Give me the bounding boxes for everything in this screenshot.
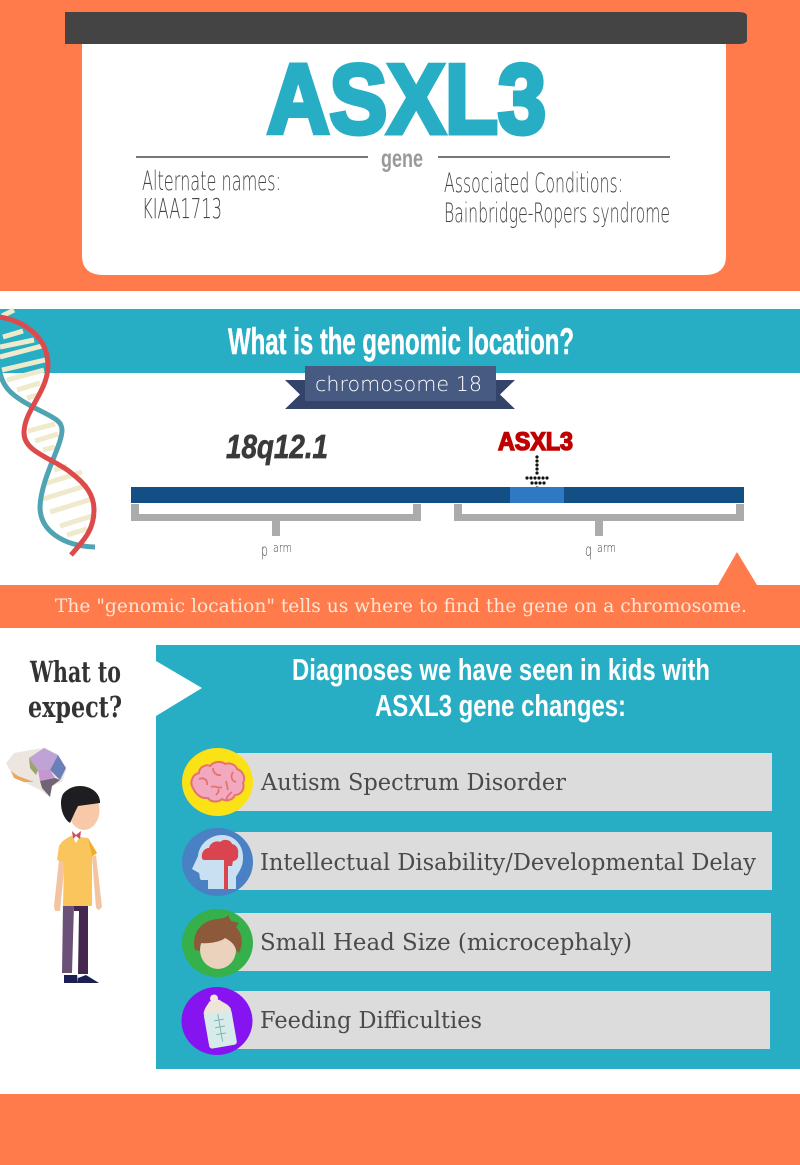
ribbon: chromosome 18 — [285, 366, 515, 409]
title: ASXL3: ASXL3 — [267, 44, 546, 154]
arrow: dotted down arrow — [525, 455, 549, 490]
footer band — [0, 1094, 800, 1165]
text: associated conditions: Associated Conditions: — [444, 168, 623, 199]
panel: header — [0, 0, 800, 291]
dark top bar — [65, 12, 747, 44]
heading band: What is the genomic location? — [228, 321, 574, 362]
text: alternate names: Alternate names: — [142, 166, 281, 197]
panel: genomic location — [0, 309, 800, 628]
callout: genomic location definition: The "genomic location" tells us where to find the gene on a chromosome. — [55, 595, 747, 617]
icon: low-poly brain — [6, 748, 66, 797]
text: alternate names — [142, 166, 281, 225]
diagnosis panel background — [156, 645, 800, 1069]
p arm bracket — [131, 504, 421, 561]
icon: head with brain — [182, 828, 253, 896]
icon: child face — [182, 909, 253, 977]
ribbon: chromosome 18: chromosome 18 — [315, 372, 482, 396]
q arm bracket: arm — [597, 541, 616, 555]
chromosome bar — [131, 487, 744, 503]
p arm bracket: arm — [273, 541, 292, 555]
item: feeding difficulties — [182, 987, 770, 1055]
icon: baby bottle — [182, 987, 252, 1055]
heading band — [0, 309, 800, 373]
heading: diagnoses: ASXL3 gene changes: — [375, 688, 626, 723]
q arm bracket: q — [585, 541, 592, 561]
item: autism spectrum disorder — [182, 748, 772, 816]
item: small head size: Small Head Size (microcephaly) — [260, 930, 632, 956]
text: associated conditions — [444, 168, 670, 229]
icon: brain on yellow — [182, 748, 253, 816]
text: alternate names: KIAA1713 — [142, 192, 222, 225]
heading: what to expect — [28, 655, 122, 724]
figure: boy — [54, 786, 102, 983]
item: intellectual disability — [182, 828, 772, 896]
item: autism spectrum disorder: Autism Spectrum Disorder — [260, 770, 566, 796]
panel: what to expect — [6, 645, 800, 1069]
item: feeding difficulties: Feeding Difficulties — [260, 1008, 482, 1034]
item: intellectual disability: Intellectual Disability/Developmental Delay — [260, 850, 756, 876]
label: 18q12.1: 18q12.1 — [226, 428, 328, 465]
label: ASXL3 gene marker: ASXL3 — [498, 428, 573, 456]
icon: DNA helix — [0, 310, 95, 555]
q arm bracket — [454, 504, 744, 561]
heading: diagnoses — [292, 652, 710, 723]
callout: genomic location definition — [0, 552, 800, 628]
heading: what to expect: What to — [29, 655, 121, 689]
subtitle: gene: gene — [381, 145, 423, 173]
item: small head size — [182, 909, 771, 977]
white card — [82, 40, 726, 275]
heading: what to expect: expect? — [28, 690, 122, 724]
p arm bracket: p — [261, 541, 268, 561]
